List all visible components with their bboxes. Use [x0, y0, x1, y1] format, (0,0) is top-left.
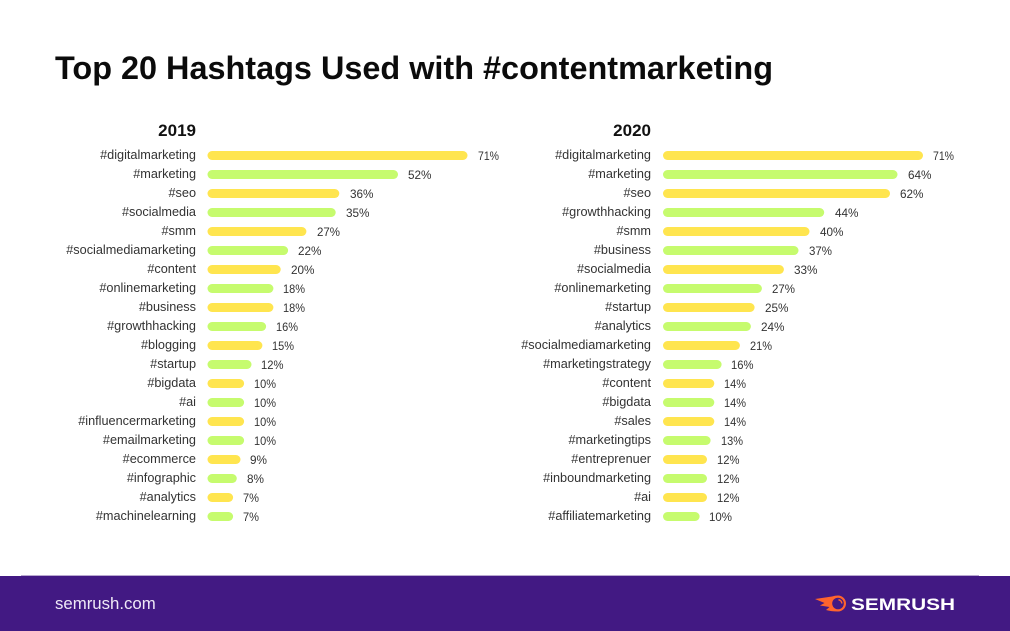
row: smm 2019: #smm: [161, 224, 196, 238]
row: bigdata 2019: 10%: [254, 377, 276, 391]
row: seo 2019: [168, 186, 374, 201]
row: marketing 2019: [133, 167, 432, 182]
row: content 2020: 14%: [724, 377, 746, 391]
row: digitalmarketing 2020: 71%: [933, 149, 954, 163]
row: analytics 2020: #analytics: [595, 319, 651, 333]
row: onlinemarketing 2019: 18%: [283, 282, 305, 296]
row: seo 2020: 62%: [900, 187, 924, 201]
row: ai 2019: 10%: [254, 396, 276, 410]
logo wordmark: SEMRUSH: [851, 596, 955, 614]
row: analytics 2020: 24%: [761, 320, 785, 334]
row: smm 2020: 40%: [820, 225, 844, 239]
row: inboundmarketing 2020: [543, 471, 740, 486]
row: socialmediamarketing 2019: [66, 243, 322, 258]
row: startup 2020: #startup: [605, 300, 651, 314]
row: influencermarketing 2019: 10%: [254, 415, 276, 429]
row: startup 2019: 12%: [261, 358, 284, 372]
row: growthhacking 2019: #growthhacking: [107, 319, 196, 333]
row: emailmarketing 2019: #emailmarketing: [103, 433, 196, 447]
row: startup 2019: #startup: [150, 357, 196, 371]
row: entreprenuer 2020: 12%: [717, 453, 740, 467]
row: sales 2020: 14%: [724, 415, 746, 429]
row: blogging 2019: [141, 338, 294, 353]
row: business 2020: [594, 243, 832, 258]
row: onlinemarketing 2019: [99, 281, 305, 296]
row: bigdata 2019: [147, 376, 276, 391]
row: bigdata 2019: #bigdata: [147, 376, 197, 390]
row: business 2019: #business: [139, 300, 196, 314]
row: analytics 2019: 7%: [243, 491, 259, 505]
row: bigdata 2020: #bigdata: [602, 395, 652, 409]
row: influencermarketing 2019: #influencermarketing: [78, 414, 196, 428]
row: marketingtips 2020: 13%: [721, 434, 743, 448]
row: analytics 2019: [140, 490, 259, 505]
row: affiliatemarketing 2020: [548, 509, 732, 524]
row: content 2019: #content: [147, 262, 196, 276]
row: seo 2020: #seo: [623, 186, 651, 200]
row: socialmedia 2020: 33%: [794, 263, 818, 277]
row: entreprenuer 2020: [571, 452, 740, 467]
row: digitalmarketing 2019: 71%: [478, 149, 499, 163]
row: inboundmarketing 2020: #inboundmarketing: [543, 471, 651, 485]
row: marketing 2020: 64%: [908, 168, 932, 182]
row: blogging 2019: 15%: [272, 339, 294, 353]
row: ai 2020: #ai: [634, 490, 651, 504]
row: socialmediamarketing 2019: #socialmediamarketing: [66, 243, 196, 257]
row: ai 2020: 12%: [717, 491, 740, 505]
row: business 2019: [139, 300, 305, 315]
row: onlinemarketing 2019: #onlinemarketing: [99, 281, 196, 295]
row: business 2020: 37%: [809, 244, 832, 258]
row: smm 2019: 27%: [317, 225, 340, 239]
heading: 2019: 2019: [158, 121, 196, 140]
row: socialmedia 2019: #socialmedia: [122, 205, 197, 219]
row: ecommerce 2019: [123, 452, 267, 467]
row: digitalmarketing 2019: [100, 148, 499, 163]
row: digitalmarketing 2019: #digitalmarketing: [100, 148, 196, 162]
panel: 2019 chart: [66, 121, 499, 524]
row: onlinemarketing 2020: [554, 281, 795, 296]
row: socialmediamarketing 2020: 21%: [750, 339, 772, 353]
row: marketing 2020: [588, 167, 932, 182]
heading: 2020: 2020: [613, 121, 651, 140]
row: marketing 2020: #marketing: [588, 167, 651, 181]
row: socialmediamarketing 2020: #socialmediamarketing: [521, 338, 651, 352]
row: socialmedia 2020: #socialmedia: [577, 262, 652, 276]
row: bigdata 2020: [602, 395, 746, 410]
row: infographic 2019: #infographic: [127, 471, 197, 485]
row: digitalmarketing 2020: #digitalmarketing: [555, 148, 651, 162]
row: infographic 2019: [127, 471, 264, 486]
row: analytics 2020: [595, 319, 785, 334]
row: socialmedia 2019: [122, 205, 370, 220]
row: seo 2020: [623, 186, 924, 201]
footer band: [0, 575, 1010, 631]
row: socialmedia 2019: 35%: [346, 206, 370, 220]
row: startup 2020: 25%: [765, 301, 789, 315]
row: digitalmarketing 2020: [555, 148, 954, 163]
row: infographic 2019: 8%: [247, 472, 264, 486]
row: smm 2020: #smm: [616, 224, 651, 238]
row: socialmediamarketing 2019: 22%: [298, 244, 322, 258]
row: business 2019: 18%: [283, 301, 305, 315]
row: entreprenuer 2020: #entreprenuer: [571, 452, 652, 466]
row: marketingtips 2020: [568, 433, 743, 448]
row: content 2020: [602, 376, 746, 391]
row: inboundmarketing 2020: 12%: [717, 472, 740, 486]
row: seo 2019: #seo: [168, 186, 196, 200]
row: affiliatemarketing 2020: 10%: [709, 510, 732, 524]
row: growthhacking 2020: [562, 205, 859, 220]
row: marketing 2019: 52%: [408, 168, 432, 182]
row: marketingtips 2020: #marketingtips: [568, 433, 651, 447]
row: growthhacking 2020: 44%: [835, 206, 859, 220]
row: onlinemarketing 2020: #onlinemarketing: [554, 281, 651, 295]
row: growthhacking 2019: 16%: [276, 320, 298, 334]
panel: 2020 chart: [521, 121, 954, 524]
row: ai 2020: [634, 490, 740, 505]
row: business 2020: #business: [594, 243, 651, 257]
row: ecommerce 2019: #ecommerce: [123, 452, 196, 466]
row: smm 2020: [616, 224, 844, 239]
title: Top 20 Hashtags Used with #contentmarketing: [55, 50, 773, 86]
row: growthhacking 2020: #growthhacking: [562, 205, 651, 219]
row: socialmediamarketing 2020: [521, 338, 772, 353]
row: smm 2019: [161, 224, 340, 239]
row: marketing 2019: #marketing: [133, 167, 196, 181]
row: bigdata 2020: 14%: [724, 396, 746, 410]
row: growthhacking 2019: [107, 319, 298, 334]
row: emailmarketing 2019: 10%: [254, 434, 276, 448]
row: ai 2019: #ai: [179, 395, 196, 409]
row: onlinemarketing 2020: 27%: [772, 282, 795, 296]
row: ecommerce 2019: 9%: [250, 453, 267, 467]
row: marketingstrategy 2020: 16%: [731, 358, 754, 372]
row: content 2019: [147, 262, 315, 277]
row: emailmarketing 2019: [103, 433, 276, 448]
row: machinelearning 2019: #machinelearning: [96, 509, 196, 523]
row: sales 2020: [614, 414, 746, 429]
row: machinelearning 2019: 7%: [243, 510, 259, 524]
row: machinelearning 2019: [96, 509, 259, 524]
row: analytics 2019: #analytics: [140, 490, 196, 504]
row: affiliatemarketing 2020: #affiliatemarketing: [548, 509, 651, 523]
icon: flame with ball: [815, 596, 846, 612]
row: startup 2020: [605, 300, 789, 315]
row: content 2019: 20%: [291, 263, 315, 277]
row: content 2020: #content: [602, 376, 651, 390]
logo: Semrush: [815, 596, 955, 614]
row: marketingstrategy 2020: #marketingstrategy: [543, 357, 652, 371]
row: influencermarketing 2019: [78, 414, 276, 429]
footer url: semrush.com: [55, 594, 156, 613]
row: sales 2020: #sales: [614, 414, 651, 428]
row: ai 2019: [179, 395, 276, 410]
row: socialmedia 2020: [577, 262, 818, 277]
row: seo 2019: 36%: [350, 187, 374, 201]
row: marketingstrategy 2020: [543, 357, 754, 372]
row: startup 2019: [150, 357, 284, 372]
row: blogging 2019: #blogging: [141, 338, 196, 352]
